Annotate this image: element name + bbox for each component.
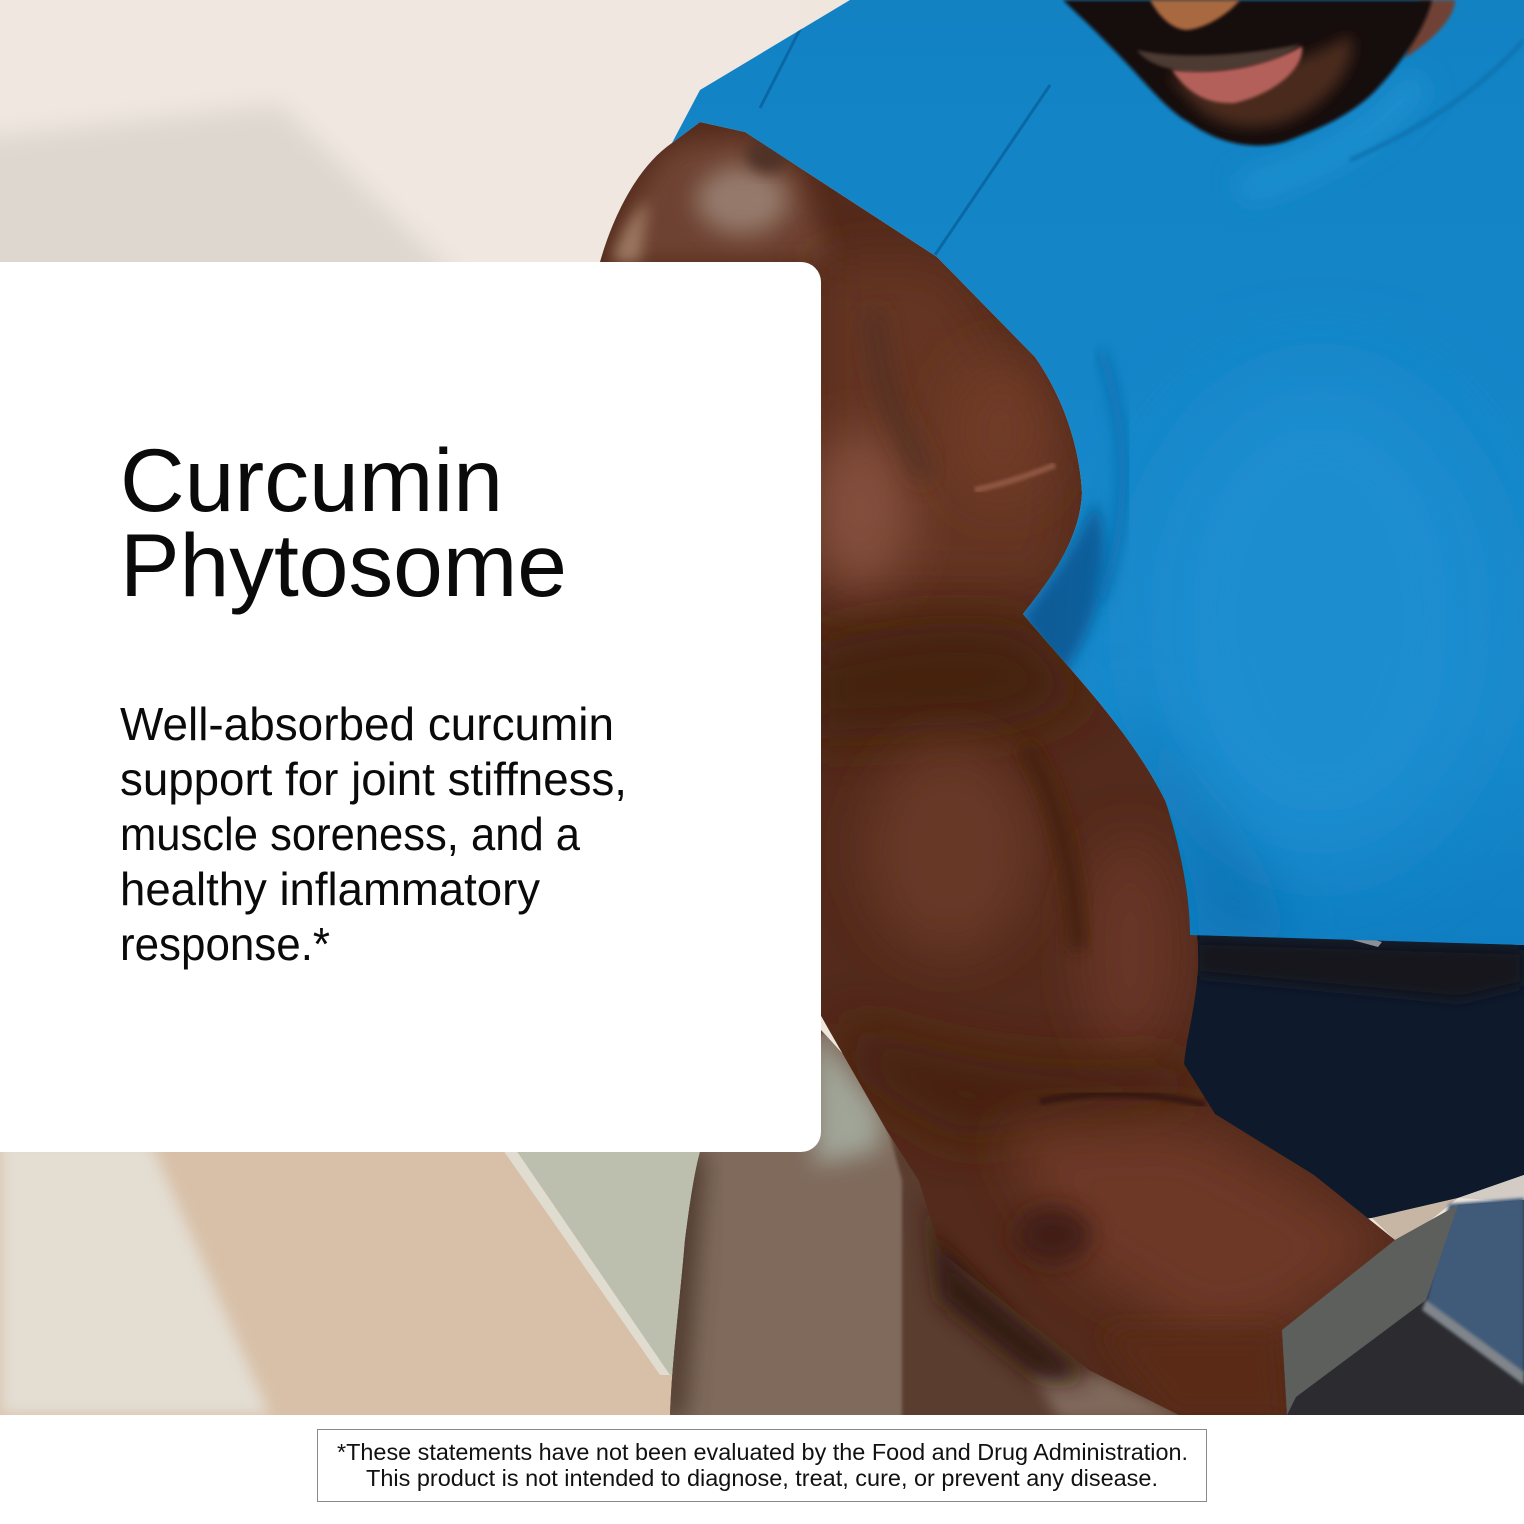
- footer band: [0, 1415, 1524, 1524]
- body text: muscle soreness, and a: [120, 808, 580, 860]
- nose: [1150, 0, 1240, 30]
- thigh: [660, 1020, 1200, 1420]
- body text: response.*: [120, 918, 330, 970]
- forearm lit area: [1000, 1125, 1390, 1340]
- panel: white text card: [0, 262, 821, 1152]
- lower lip: [1172, 46, 1302, 103]
- background: upper wall and gray patch: [0, 0, 800, 300]
- dumbbell: [1282, 1175, 1524, 1415]
- body text: [120, 698, 627, 970]
- heading: Curcumin Phytosome: Curcumin: [120, 430, 503, 530]
- shorts: [1170, 930, 1524, 1225]
- heading: Curcumin Phytosome: [120, 430, 567, 615]
- body text: support for joint stiffness,: [120, 753, 627, 805]
- body text: healthy inflammatory: [120, 863, 540, 915]
- elbow crease: [1040, 1094, 1205, 1105]
- shoulder highlight: [610, 135, 830, 262]
- blue shirt: [670, 0, 1524, 950]
- face and beard: [1063, 0, 1455, 146]
- arm: [590, 120, 1410, 1420]
- beard: [1063, 0, 1432, 146]
- disclaimer box: [318, 1430, 1206, 1502]
- body text: Well-absorbed curcumin: [120, 698, 614, 750]
- chin patch: [1165, 35, 1352, 127]
- heading: Curcumin Phytosome: Phytosome: [120, 515, 567, 615]
- disclaimer box: This product is not intended to diagnose, treat, cure, or prevent any disease.: [366, 1465, 1158, 1491]
- background: floor and bench: [0, 1140, 760, 1415]
- neck skin at right: [1405, 0, 1455, 58]
- disclaimer box: *These statements have not been evaluated by the Food and Drug Administration.: [337, 1439, 1188, 1465]
- upper lip: [1137, 44, 1300, 72]
